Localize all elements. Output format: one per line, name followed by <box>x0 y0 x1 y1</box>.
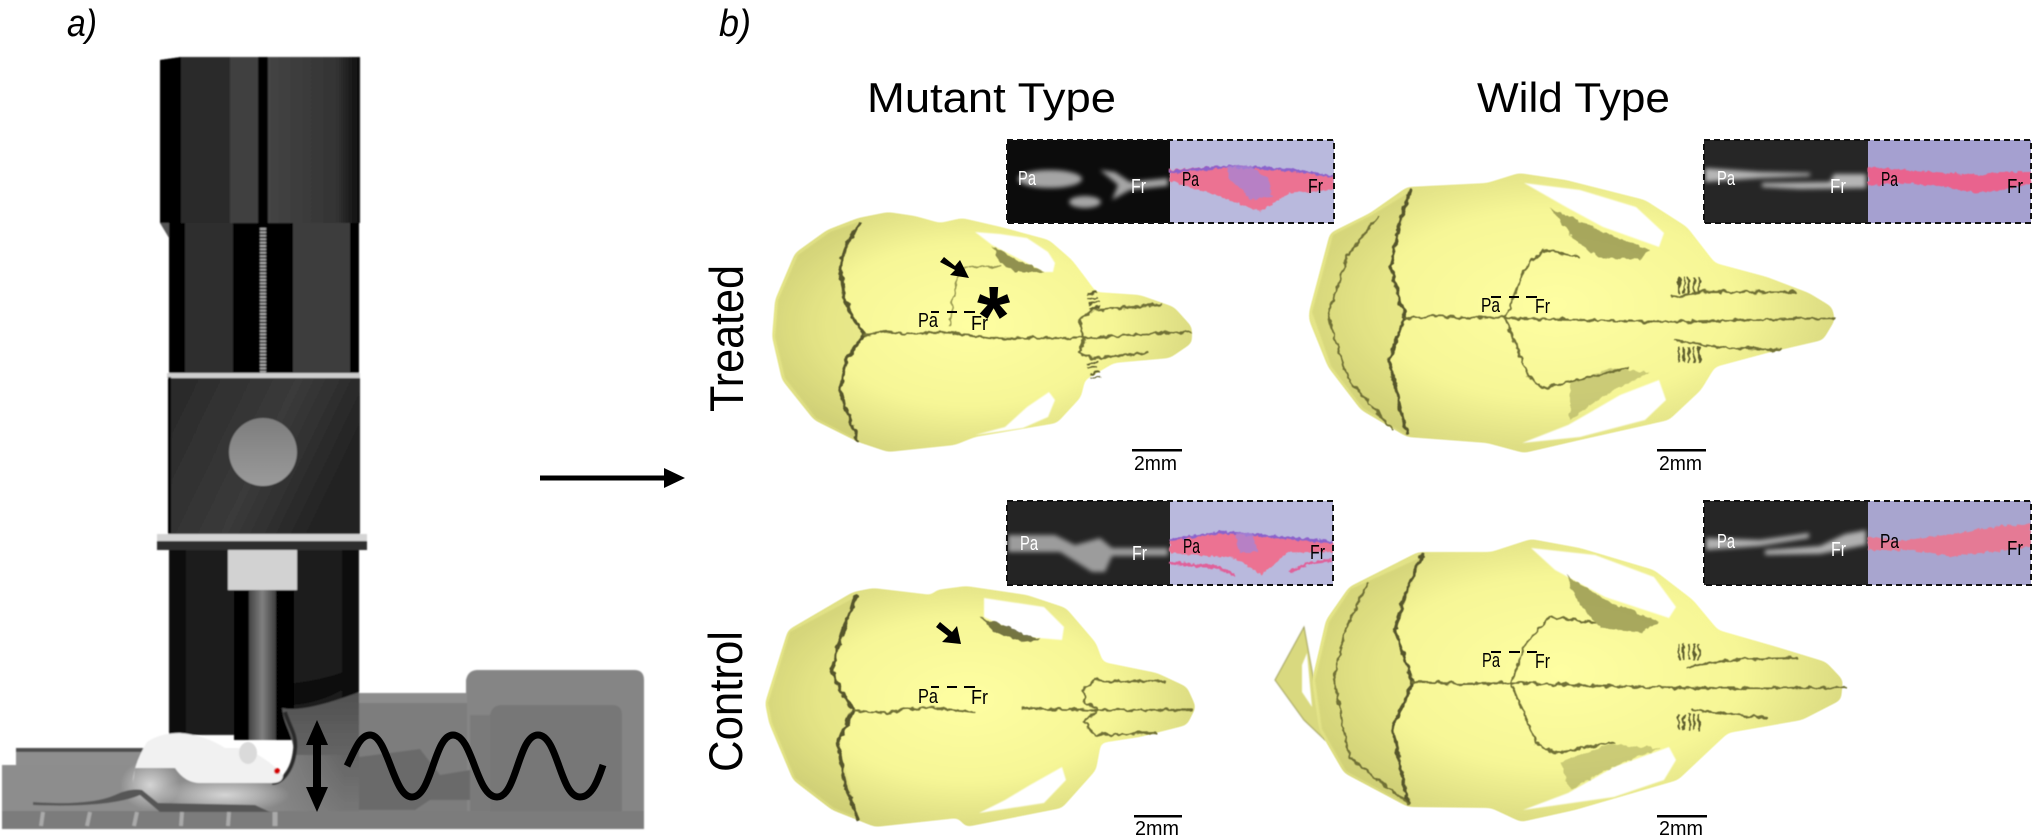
scale bar 2mm: 2mm <box>1134 453 1177 475</box>
device lower column with indenter <box>169 550 359 740</box>
suture labels: Pa <box>1482 650 1501 672</box>
inset: wild type treated sections: Fr <box>1830 176 1846 198</box>
suture labels <box>918 310 988 335</box>
row label: Treated: Treated <box>700 265 753 412</box>
inset: mutant control sections: Fr <box>1132 543 1147 565</box>
device top motor block <box>160 57 360 238</box>
inset: mutant control sections: Pa <box>1183 536 1201 558</box>
suture labels <box>1481 295 1550 318</box>
inset: mutant control sections <box>1007 501 1333 585</box>
inset: mutant control sections: Pa <box>1020 533 1039 555</box>
inset: wild type treated sections: Pa <box>1717 168 1736 190</box>
skull: mutant control <box>765 586 1196 838</box>
panel label a: a) <box>67 3 97 45</box>
inset: mutant treated sections <box>1007 140 1334 223</box>
panel: loading device <box>2 57 644 829</box>
device shelf <box>157 534 367 550</box>
suture labels: Fr <box>971 313 988 335</box>
heading: Wild Type: Wild Type <box>1477 74 1670 121</box>
arrow: control pointer <box>936 622 961 644</box>
suture labels: Fr <box>971 687 988 709</box>
suture labels: Pa <box>918 686 939 708</box>
arrow: defect pointer <box>940 257 969 278</box>
arrow: a to b <box>540 468 685 488</box>
device moving plate with disc <box>167 373 360 535</box>
skull: mutant treated <box>772 212 1192 475</box>
inset: wild type control sections: Fr <box>1831 539 1846 561</box>
suture labels: Pa <box>1481 295 1501 317</box>
inset: wild type treated sections: Pa <box>1881 169 1899 191</box>
inset: mutant control sections: Fr <box>1310 542 1325 564</box>
inset: wild type control sections <box>1704 501 2031 585</box>
inset: mutant treated sections: Fr <box>1131 176 1146 198</box>
suture labels <box>918 686 988 709</box>
skull: wild type treated <box>1309 173 1835 475</box>
panel label b: b) <box>719 3 751 45</box>
device lead screw column <box>169 223 359 374</box>
inset: mutant treated sections: Pa <box>1018 168 1037 190</box>
suture labels: Fr <box>1535 651 1550 673</box>
suture labels <box>1482 650 1550 673</box>
inset: mutant treated sections: Fr <box>1308 176 1323 198</box>
inset: wild type control sections: Pa <box>1880 531 1900 553</box>
scale bar 2mm: 2mm <box>1659 453 1702 475</box>
mouse <box>33 733 283 826</box>
inset: wild type control sections: Pa <box>1717 531 1736 553</box>
icon: vertical double arrow <box>306 720 328 812</box>
transparent mouse holder <box>2 670 644 829</box>
inset: wild type treated sections <box>1704 140 2031 223</box>
inset: mutant treated sections: Pa <box>1182 169 1200 191</box>
icon: vibration sine wave <box>347 735 603 797</box>
row label: Control: Control <box>699 631 752 772</box>
inset: wild type control sections: Fr <box>2007 538 2023 560</box>
skull: wild type control <box>1275 539 1846 838</box>
inset: wild type treated sections: Fr <box>2007 176 2023 198</box>
suture labels: Pa <box>918 310 939 332</box>
suture labels: Fr <box>1535 296 1550 318</box>
heading: Mutant Type: Mutant Type <box>867 74 1116 121</box>
asterisk: * <box>977 270 1010 365</box>
